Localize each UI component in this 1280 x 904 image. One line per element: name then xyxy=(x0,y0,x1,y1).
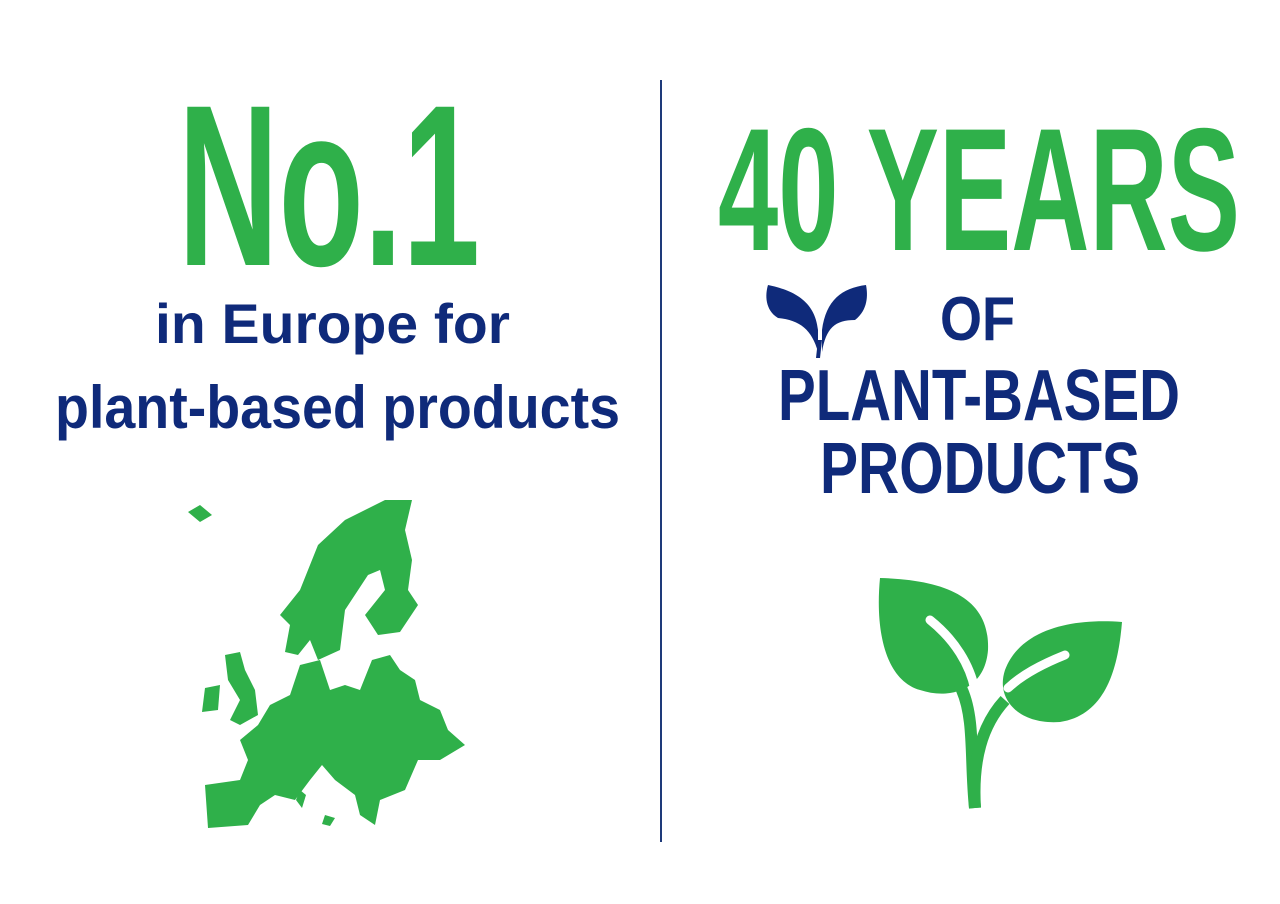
heading: No.1: No.1 xyxy=(178,57,480,314)
map: Europe xyxy=(188,500,465,828)
text block: PRODUCTS: PRODUCTS xyxy=(820,429,1140,509)
divider xyxy=(660,80,662,842)
text block: PLANT-BASED: PLANT-BASED xyxy=(778,356,1180,436)
text block: plant-based products: plant-based products xyxy=(55,374,620,441)
panel: right xyxy=(718,93,1240,808)
text block: in Europe for: in Europe for xyxy=(155,292,510,355)
icon: small leaves xyxy=(766,285,867,358)
text block: OF: OF xyxy=(940,285,1015,354)
panel: left xyxy=(55,57,620,828)
icon: sprout xyxy=(879,578,1122,808)
